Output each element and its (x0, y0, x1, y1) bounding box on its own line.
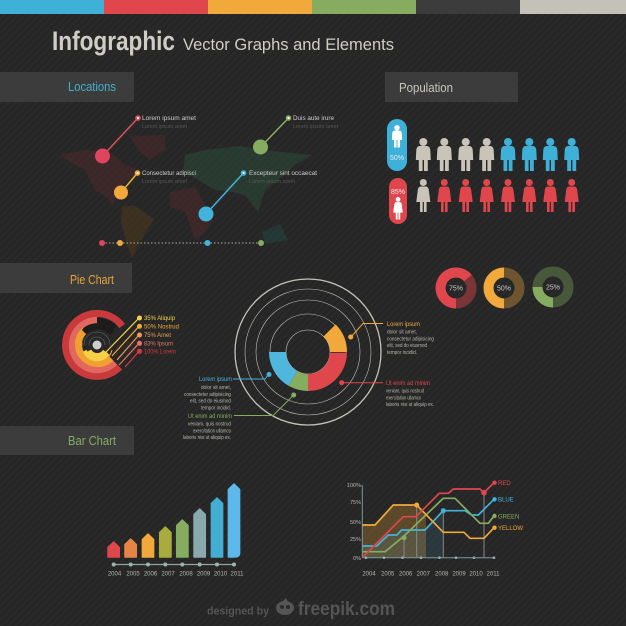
axis labels: 100% (347, 483, 361, 489)
callout: red: Ut enim ad minim (386, 380, 430, 387)
population: male row (387, 119, 579, 171)
pin: blue: Lorem ipsum amet (249, 179, 295, 185)
pin: red: Lorem ipsum amet (142, 124, 187, 130)
ring chart legend: 35% Aliquip (144, 315, 175, 322)
title: Infographic (52, 26, 175, 56)
dotted location timeline (99, 240, 264, 246)
axis labels (347, 483, 361, 562)
badge: 85%: 85% (391, 189, 405, 196)
pin: green: Duis aute irure (293, 115, 334, 122)
callout: red: laboris nisi ut aliquip ex. (386, 402, 434, 408)
pin: blue (198, 170, 317, 222)
badge: 50% (387, 119, 407, 171)
callout: red: veniam, quis nostrud (386, 388, 424, 394)
line chart: 2008 (435, 572, 449, 578)
ring chart legend: 100% Lorem (144, 348, 176, 356)
callout: orange: dolor sit amet, (387, 330, 417, 336)
callout: green: laboris nisi ut aliquip ex. (183, 435, 231, 441)
small donut: 75% (440, 272, 472, 304)
bar chart timeline: 2004 (108, 572, 122, 578)
callout: blue: elit, sed do eiusmod (190, 398, 231, 404)
series labels (498, 481, 523, 532)
world map (60, 135, 312, 258)
line chart: 2007 (417, 572, 431, 578)
ring chart legend: 75% Amet (144, 332, 171, 339)
footer credit: designed by (207, 606, 270, 618)
bar chart timeline: 2008 (179, 572, 193, 578)
pin: orange (114, 170, 196, 200)
small donut: 50%: 50% (497, 286, 511, 292)
callout: green: Ut enim ad minim (188, 413, 232, 420)
callout: green (183, 392, 296, 441)
pin: red: Lorem ipsum amet (142, 115, 196, 122)
heading: Population (385, 72, 518, 102)
axis labels: 75% (350, 500, 361, 506)
line chart: 2005 (381, 572, 395, 578)
bar chart timeline: 2007 (161, 572, 175, 578)
callout: orange (348, 321, 434, 356)
top colour strip (0, 0, 626, 14)
series labels: RED (498, 481, 511, 487)
axis labels: 25% (350, 537, 361, 543)
callout: orange: Lorem ipsum (387, 321, 420, 328)
ring chart legend: 83% Ipsum (144, 340, 173, 348)
callout: red (339, 380, 434, 408)
pin: blue: Excepteur sint occaecat (249, 170, 317, 177)
axis labels: 0% (353, 556, 361, 562)
callout: blue: Lorem ipsum (199, 376, 232, 383)
population: female row (389, 178, 579, 224)
callout: green: veniam, quis nostrud (188, 422, 231, 428)
pin: orange: Consectetur adipisci (142, 170, 196, 177)
callout: blue: tempor incidid. (201, 406, 231, 412)
bar chart (108, 484, 244, 578)
pin: green: Lorem ipsum amet (293, 124, 338, 130)
title (52, 26, 394, 56)
heading: Bar Chart (0, 426, 134, 455)
callout: orange: elit, sed do eiusmod (387, 343, 427, 349)
callout: blue (184, 372, 272, 412)
callout: orange: tempor incidid. (387, 350, 417, 356)
callout: orange: consectetur adipisicing (387, 336, 434, 342)
line chart: 2010 (469, 572, 483, 578)
small donut: 25%: 25% (546, 284, 560, 292)
line chart: 2004 (362, 572, 376, 578)
badge: 50%: 50% (390, 155, 404, 162)
footer credit (207, 598, 395, 620)
bar chart timeline: 2011 (231, 572, 244, 578)
ring chart legend: 50% Nostrud (144, 324, 179, 330)
bar chart timeline: 2006 (144, 572, 158, 578)
axis labels: 50% (350, 520, 361, 526)
line chart: 2006 (399, 572, 413, 578)
callout: blue: consectetur adipisicing (184, 392, 231, 398)
heading: Pie Chart (0, 263, 132, 293)
pin: red (95, 115, 196, 164)
heading: Pie Chart: Pie Chart (70, 272, 114, 287)
small donut: 25% (538, 272, 568, 302)
line chart (347, 480, 523, 578)
radial ring chart (66, 313, 122, 376)
heading: Bar Chart: Bar Chart (68, 433, 116, 448)
heading: Locations (0, 72, 134, 102)
series labels: BLUE (498, 498, 514, 504)
pin: green (253, 115, 338, 154)
bar chart timeline (108, 562, 244, 578)
ring chart legend (106, 315, 179, 367)
bar chart timeline: 2005 (126, 572, 140, 578)
bar chart timeline: 2010 (214, 572, 228, 578)
heading: Population: Population (399, 80, 453, 95)
series markers (402, 480, 497, 540)
area fills (362, 505, 443, 558)
footer credit: freepik.com (298, 599, 395, 620)
title: Vector Graphs and Elements (183, 35, 394, 54)
icon: freepik bird (276, 598, 294, 615)
badge: 85% (389, 178, 407, 224)
heading: Locations: Locations (68, 79, 116, 94)
series lines (362, 483, 494, 558)
callout: blue: dolor sit amet, (201, 385, 231, 391)
series labels: YELLOW (498, 526, 523, 532)
bar chart timeline: 2009 (197, 572, 211, 578)
callout: red: exercitation ullamco (386, 396, 421, 402)
line chart: 2011 (487, 572, 500, 578)
small donut: 75%: 75% (449, 286, 463, 292)
central donut chart (235, 279, 381, 425)
small donut: 50% (488, 272, 520, 304)
pin: orange: Lorem ipsum amet (142, 179, 187, 185)
series labels: GREEN (498, 514, 519, 520)
locations: map pins (95, 115, 338, 246)
axes (362, 485, 494, 558)
line chart: 2009 (452, 572, 466, 578)
callout: green: exercitation ullamco (193, 428, 231, 434)
